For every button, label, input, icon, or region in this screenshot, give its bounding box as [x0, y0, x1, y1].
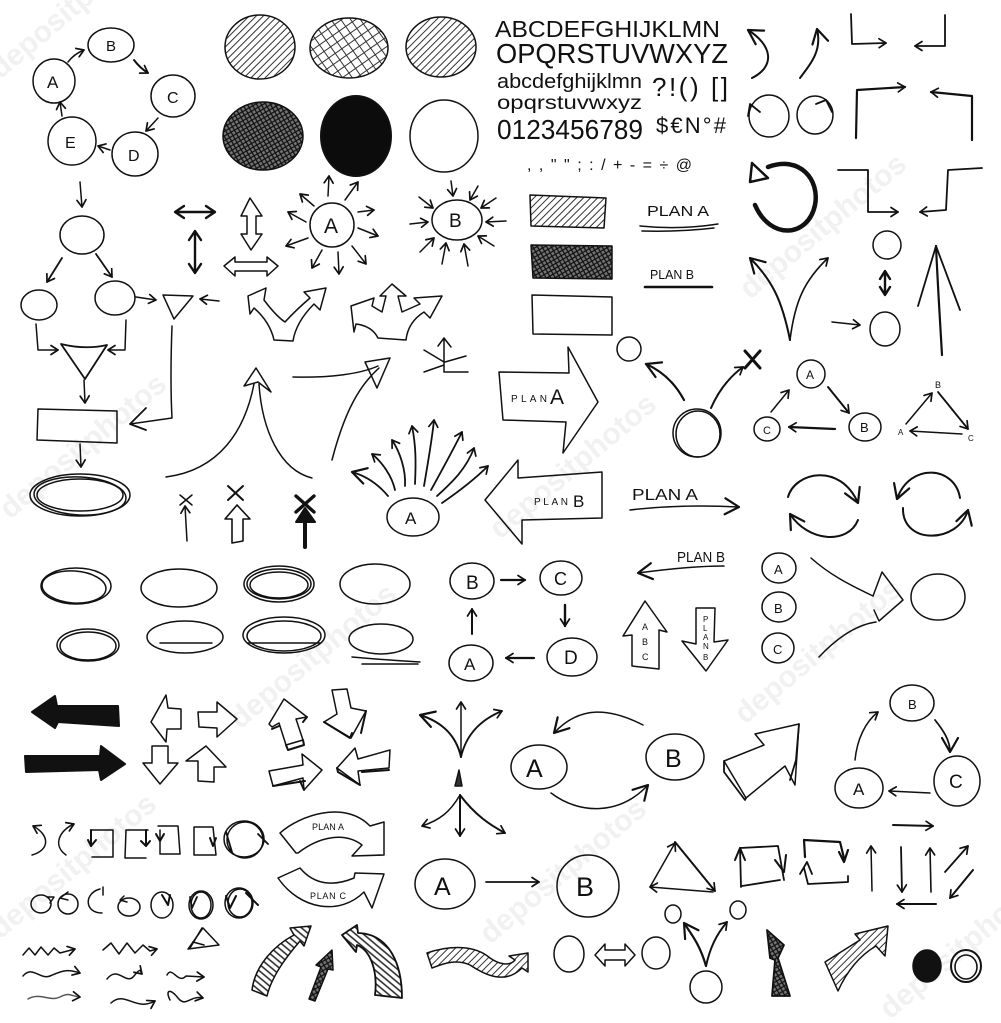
A and B circle exchange: B [665, 745, 682, 773]
watermark text: depositphotos [223, 577, 403, 735]
curved plan A and plan C block arrows: PLAN A [312, 822, 344, 832]
watermark text: depositphotos [733, 147, 913, 305]
triangle diagrams A B C: B [860, 420, 869, 435]
circle A with radial arrows: A [324, 215, 338, 238]
squiggle arrows [23, 943, 204, 1004]
hatched arrows and black dots [767, 926, 981, 996]
triangle diagrams A B C: B [935, 380, 941, 390]
up house arrow and down plan B arrow: B [703, 653, 708, 662]
outline fork arrows [248, 284, 468, 372]
plan A block arrow: A [550, 386, 564, 409]
watermark text: depositphotos [483, 387, 663, 545]
plan A and plan B arrows: PLAN A [632, 487, 698, 504]
straight arrow set [871, 825, 973, 904]
three hatched curved arrows [252, 925, 402, 1001]
burst of arrows from circle A: A [405, 509, 417, 528]
small loop arrows, row two [31, 887, 258, 919]
list of three lettered circles: A [774, 562, 783, 577]
plan A and plan B arrows: PLAN B [677, 549, 725, 566]
A and B circle exchange: A [526, 755, 543, 783]
handwritten alphabet: ?!() [] [652, 72, 728, 102]
four-way arrow cluster [420, 702, 505, 836]
circle B with arrows pointing in: B [449, 211, 462, 232]
watermark text: depositphotos [728, 572, 908, 730]
large 3D arrow [724, 724, 799, 800]
triangle cycle A B C: C [949, 772, 963, 793]
up house arrow and down plan B arrow [623, 601, 728, 671]
four circle cycle A B C D: D [564, 648, 578, 669]
curved plan A and plan C block arrows: PLAN C [310, 891, 346, 901]
flow chart: cycle of five letters: A [47, 73, 59, 92]
circular arrow pairs [788, 473, 968, 537]
four outline arrows [143, 695, 237, 784]
handwritten alphabet: ABCDEFGHIJKLMN [495, 16, 720, 42]
plan B block arrow: PLAN [534, 497, 568, 508]
triangle diagrams A B C: A [898, 428, 904, 437]
circle B with arrows pointing in [410, 181, 506, 266]
list of three lettered circles: C [773, 642, 782, 657]
wavy hatched arrow [427, 948, 528, 977]
handwritten alphabet: abcdefghijklmn [497, 71, 642, 93]
A and B circle exchange [511, 712, 704, 809]
plan bars and underlined labels: PLAN B [650, 267, 694, 282]
handwritten alphabet: 0123456789 [497, 114, 643, 145]
handwritten alphabet [495, 16, 728, 174]
four circle cycle A B C D: C [554, 569, 567, 589]
list of three lettered circles [762, 553, 796, 663]
converging arrow to circle [811, 558, 965, 657]
plan bars and underlined labels [530, 195, 718, 335]
flow chart: cycle of five letters: D [128, 148, 140, 165]
swatches: hatched circles [223, 15, 478, 176]
flow chart: cycle of five letters: E [65, 135, 76, 152]
up house arrow and down plan B arrow: A [642, 622, 648, 632]
handwritten alphabet: opqrstuvwxyz [497, 93, 642, 114]
up house arrow and down plan B arrow: C [642, 652, 649, 662]
flow chart: process from circles to ellipse [21, 182, 219, 517]
small triangle arrow [188, 928, 219, 949]
plan B block arrow [485, 460, 602, 544]
up house arrow and down plan B arrow: N [703, 642, 709, 651]
plan A block arrow [499, 347, 598, 453]
plan A block arrow: PLAN [511, 394, 547, 405]
up house arrow and down plan B arrow: P [703, 615, 708, 624]
triangle cycle A B C [835, 685, 980, 808]
burst of arrows from circle A [352, 420, 488, 536]
circle with split arrows and cross [617, 337, 760, 457]
triangle diagrams A B C: C [763, 425, 771, 437]
up house arrow and down plan B arrow: L [703, 624, 708, 633]
four circle cycle A B C D [449, 561, 597, 681]
handwritten alphabet: $€N°# [656, 113, 727, 138]
four circle cycle A B C D: A [464, 655, 476, 674]
small multi-direction arrows [175, 198, 278, 276]
four 3D arrows [269, 689, 390, 790]
top right arrows [748, 14, 982, 355]
A arrow to B [415, 855, 619, 917]
triangle and square cycle arrows [650, 840, 848, 892]
plan bars and underlined labels: PLAN A [647, 203, 709, 220]
triangle cycle A B C: A [853, 780, 865, 799]
heavy black arrows [25, 696, 125, 780]
circle pair with double arrow [554, 936, 670, 972]
A arrow to B: B [576, 872, 594, 902]
plan B block arrow: B [573, 492, 584, 511]
three circles with Y arrows [665, 901, 746, 1003]
flow chart: cycle of five letters [33, 28, 195, 176]
flow chart: cycle of five letters: C [167, 90, 179, 107]
handwritten alphabet: , , " " ; : / + - = ÷ @ [527, 157, 692, 174]
eight sketched ellipses [41, 564, 420, 664]
flow chart: cycle of five letters: B [106, 38, 116, 55]
three small up arrows [180, 486, 315, 547]
up house arrow and down plan B arrow: B [642, 637, 648, 647]
curved plan A and plan C block arrows [278, 812, 384, 908]
A arrow to B: A [434, 873, 451, 901]
list of three lettered circles: B [774, 601, 783, 616]
triangle diagrams A B C [754, 360, 974, 443]
triangle diagrams A B C: C [968, 434, 974, 443]
watermark text: depositphotos [473, 792, 653, 950]
triangle diagrams A B C: A [806, 368, 814, 382]
four circle cycle A B C D: B [466, 573, 479, 594]
up house arrow and down plan B arrow: A [703, 633, 709, 642]
plan A and plan B arrows [630, 487, 739, 573]
handwritten alphabet: OPQRSTUVWXYZ [496, 38, 728, 69]
merging up arrow and curved arrows [166, 358, 390, 478]
small curved and loop arrows, row one [32, 821, 268, 858]
triangle cycle A B C: B [908, 697, 917, 712]
circle A with radial arrows [286, 176, 378, 274]
